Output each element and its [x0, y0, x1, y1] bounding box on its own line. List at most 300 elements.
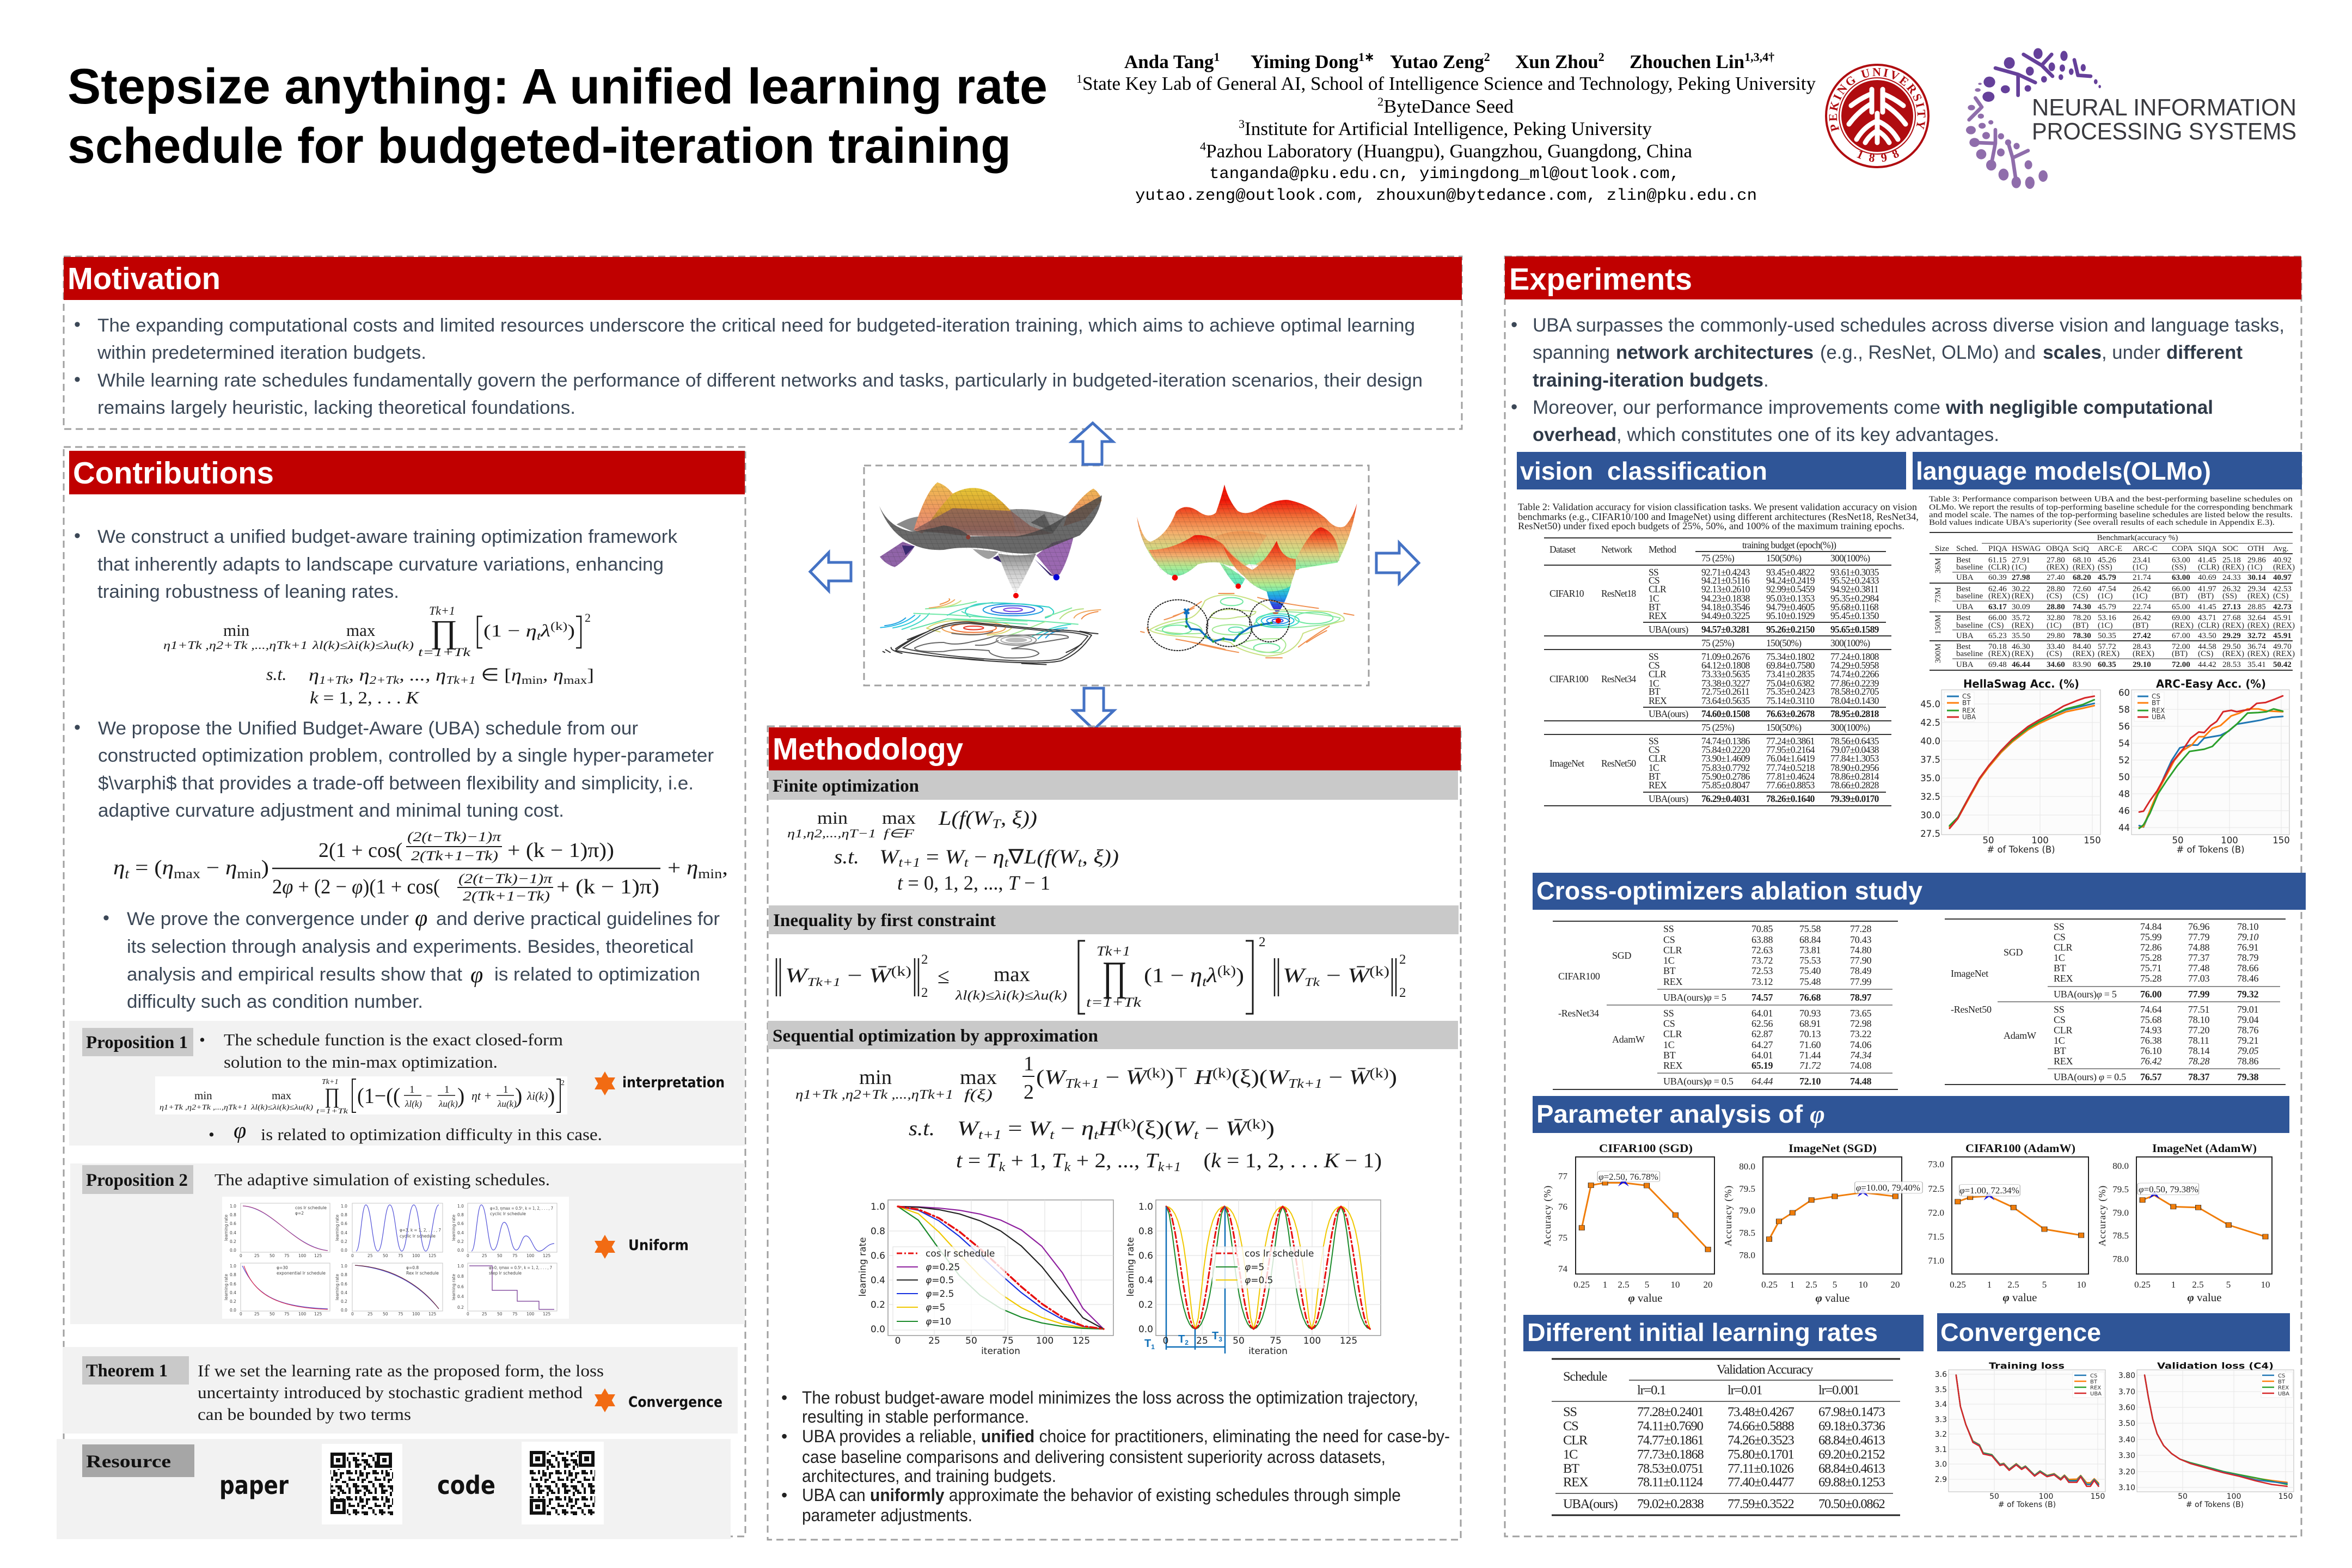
heading: motivation: Motivation — [68, 261, 220, 296]
table: initial learning rate accuracy: UBA(ours) — [1563, 1497, 1618, 1511]
table: CIFAR100 ablation: 72.98 — [1850, 1018, 1872, 1029]
chart: CIFAR100 SGD: 2.5 — [1618, 1279, 1630, 1290]
formula: min-max objective — [163, 604, 594, 707]
chart: training loss: 3.2 — [1935, 1430, 1947, 1439]
table 2: validation accuracy: 94.21±0.5116 — [1701, 575, 1750, 586]
table 3: OLMo benchmark results: 72.00 — [2172, 660, 2190, 669]
table 3: OLMo benchmark results: 43.50 — [2198, 632, 2216, 640]
formula: sequential optimization: k+1 — [1158, 1160, 1181, 1174]
table: ImageNet ablation: 78.76 — [2237, 1025, 2258, 1036]
text: convergence sub-bullet: and derive practical guidelines for — [436, 909, 720, 929]
formula: inequality: W — [1283, 964, 1300, 987]
table 3: OLMo benchmark results: Avg. — [2273, 544, 2288, 553]
table 2: validation accuracy: 78.58±0.2705 — [1830, 686, 1879, 697]
table: ImageNet ablation: 79.01 — [2237, 1004, 2258, 1015]
chart: CIFAR100 AdamW — [1928, 1142, 2088, 1304]
chart: cyclic learning rate curves: 0.0 — [1138, 1324, 1153, 1335]
table: initial learning rate accuracy: BT — [1563, 1461, 1579, 1476]
table 3: OLMo benchmark results: (REX) — [2222, 650, 2244, 658]
formula: finite optimization: t = 0, 1, 2, ..., T − 1 — [897, 872, 1050, 895]
formula: closed-form objective: ( — [393, 1083, 400, 1108]
chart: HellaSwag accuracy: 35.0 — [1920, 773, 1940, 783]
table: initial learning rate accuracy: 77.40±0.4477 — [1728, 1475, 1794, 1490]
chart: training loss: 150 — [2091, 1492, 2105, 1501]
table: ImageNet ablation: REX — [2054, 973, 2073, 984]
chart: HellaSwag accuracy: # of Tokens (B) — [1987, 844, 2055, 855]
formula: finite optimization: − — [968, 846, 993, 868]
table 2: validation accuracy: 75.84±0.2220 — [1701, 744, 1750, 755]
table: CIFAR100 ablation: 65.19 — [1751, 1060, 1773, 1071]
table 3: OLMo benchmark results: (1C) — [2012, 563, 2026, 572]
table 3: OLMo benchmark results: (1C) — [2098, 621, 2112, 630]
formula: sequential optimization: W — [1267, 1066, 1285, 1089]
chart: HellaSwag accuracy: 30.0 — [1920, 810, 1940, 820]
formula: finite optimization: η — [993, 846, 1003, 868]
table 2: validation accuracy: REX — [1649, 780, 1667, 791]
table: ImageNet ablation: 76.42 — [2140, 1056, 2161, 1067]
formula: UBA schedule: η — [162, 856, 174, 879]
text: experiments summary: . — [1763, 370, 1769, 391]
table 3: OLMo benchmark results: (1C) — [2133, 563, 2147, 572]
chart: ImageNet SGD: 79.5 — [1739, 1184, 1755, 1194]
table: initial learning rate accuracy: 74.66±0.5888 — [1728, 1419, 1794, 1434]
heading: cross-optimizers ablation study: Cross-optimizers ablation study — [1536, 877, 1922, 905]
table 2: validation accuracy: SS — [1649, 567, 1658, 578]
chart: six schedule approximations: Rex lr schedule — [406, 1271, 439, 1276]
icon: NeurIPS logo: PROCESSING SYSTEMS — [2032, 118, 2296, 145]
chart: six schedule approximations: 1.0 — [341, 1264, 347, 1269]
table 3: OLMo benchmark results: (REX) — [1988, 650, 2010, 658]
formula: finite optimization — [787, 807, 1119, 895]
table 2: validation accuracy: 95.35±0.2984 — [1830, 593, 1879, 604]
table 3: OLMo benchmark results — [1930, 532, 2295, 670]
formula: UBA schedule: + (k − 1)π)) — [507, 839, 614, 862]
formula: inequality — [776, 935, 1406, 1014]
panel: experiments — [1505, 256, 2306, 1536]
text: theorem statement: If we set the learning rate as the proposed form, the loss — [198, 1361, 604, 1380]
formula: sequential optimization: (k) — [1247, 1117, 1266, 1132]
table 2: validation accuracy: 77.84±1.3053 — [1830, 753, 1879, 764]
callout: interpretation: interpretation — [622, 1074, 725, 1091]
table: ImageNet ablation: 79.04 — [2237, 1014, 2258, 1025]
formula: min-max objective: η — [511, 665, 520, 684]
formula: closed-form objective: ) — [515, 1083, 522, 1108]
table 3: OLMo benchmark results: SciQ — [2073, 544, 2089, 553]
chart: validation loss: 3.20 — [2118, 1468, 2135, 1477]
chart: ImageNet SGD: 78.0 — [1739, 1250, 1755, 1260]
chart: CIFAR100 SGD: CIFAR100 (SGD) — [1599, 1142, 1693, 1155]
table 3: OLMo benchmark results: 44.58 — [2198, 642, 2216, 651]
table: CIFAR100 ablation: 77.99 — [1850, 976, 1872, 987]
chart: six schedule approximations: 0.6 — [457, 1284, 464, 1289]
table: initial learning rate accuracy: 68.84±0.4613 — [1818, 1461, 1885, 1476]
table 3: OLMo benchmark results: 27.91 — [2012, 556, 2030, 565]
chart: six schedule approximations: 0.2 — [341, 1299, 347, 1304]
panel: methodology — [768, 726, 1461, 1540]
chart: ARC-Easy accuracy: 52 — [2118, 755, 2130, 765]
chart: six schedule approximations: 0 — [467, 1312, 469, 1316]
table 3: OLMo benchmark results: Best — [1956, 614, 1971, 622]
text: convergence sub-bullet: φ — [415, 906, 427, 931]
chart: training loss: Training loss — [1989, 1361, 2065, 1371]
table 3: OLMo benchmark results: 45.26 — [2098, 556, 2116, 565]
chart: CIFAR100 SGD: 5 — [1645, 1279, 1649, 1290]
table 3: OLMo benchmark results: baseline — [1956, 563, 1983, 572]
formula: sequential optimization: − — [1054, 1117, 1081, 1140]
formula: min-max objective: ] — [587, 665, 594, 684]
table: CIFAR100 ablation: 72.10 — [1799, 1076, 1821, 1087]
table: ImageNet ablation: 78.11 — [2188, 1035, 2209, 1046]
table 3: OLMo benchmark results: SIQA — [2198, 544, 2217, 553]
table 3: OLMo benchmark results: 83.90 — [2073, 660, 2091, 669]
chart: six schedule approximations: 1.0 — [457, 1204, 464, 1209]
table 3: OLMo benchmark results: Best — [1956, 556, 1971, 565]
table: CIFAR100 ablation: UBA(ours)φ = 5 — [1663, 992, 1726, 1003]
formula: closed-form objective: Tk+1 — [322, 1078, 338, 1086]
authors and affiliations: 2 — [1598, 50, 1604, 64]
formula: UBA schedule: (2(t−Tk)−1)π — [407, 830, 502, 844]
chart: ImageNet AdamW: φ value — [2187, 1291, 2222, 1304]
chart: validation loss: 3.60 — [2118, 1404, 2135, 1412]
panel: motivation — [64, 256, 1462, 429]
title: Stepsize anything: A unified learning rate — [68, 59, 1048, 114]
chart: learning rate curves by phi: 125 — [1073, 1336, 1090, 1346]
formula: min-max objective: η — [309, 665, 317, 684]
table 2: validation accuracy: 73.90±1.4609 — [1701, 753, 1750, 764]
heading: vision classification: vision classification — [1520, 457, 1767, 485]
table: ImageNet ablation: 78.10 — [2188, 1014, 2209, 1025]
chart: six schedule approximations: 125 — [428, 1312, 437, 1316]
formula: sequential optimization: (W — [1036, 1066, 1062, 1089]
table 2: validation accuracy: 74.29±0.5958 — [1830, 660, 1879, 671]
table 3: OLMo benchmark results: (REX) — [2012, 621, 2033, 630]
chart: six schedule approximations: 0 — [240, 1253, 242, 1258]
table 2: validation accuracy: 76.63±0.2678 — [1766, 708, 1815, 719]
chart: training loss: UBA — [2090, 1391, 2102, 1397]
table: CIFAR100 ablation: 78.97 — [1850, 992, 1872, 1003]
chart: validation loss — [2118, 1361, 2294, 1509]
table 3: OLMo benchmark results: 67.00 — [2172, 632, 2190, 640]
text: second contribution: We propose the Unified Budget-Aware (UBA) schedule from our — [98, 718, 638, 739]
table: initial learning rate accuracy: 74.77±0.1861 — [1637, 1433, 1704, 1448]
text: motivation bullets: The expanding computational costs and limited resources underscore the critical need for budgeted-iteration training, which aims to achieve optimal learning — [97, 315, 1415, 336]
table 2: validation accuracy: 95.10±0.1929 — [1766, 610, 1815, 621]
chart: cyclic learning rate curves: iteration — [1248, 1346, 1288, 1357]
chart: HellaSwag accuracy: BT — [1962, 699, 1971, 707]
formula: finite optimization: L(f(W — [939, 807, 985, 830]
table: ImageNet ablation: 74.88 — [2188, 942, 2209, 953]
chart: cyclic learning rate curves: 0.6 — [1138, 1251, 1153, 1261]
text: second contribution: • — [74, 717, 81, 738]
formula: min-max objective: min — [522, 673, 543, 687]
formula: sequential optimization: Tk+1 — [1288, 1077, 1322, 1091]
table 3: OLMo benchmark results: UBA — [1956, 573, 1974, 582]
text: methodology takeaways: case baseline comparisons and delivering consistent superiority across datasets, — [802, 1447, 1386, 1467]
text: proposition 1 statement: The schedule function is the exact closed-form — [224, 1030, 563, 1049]
table 3: OLMo benchmark results: 27.40 — [2047, 573, 2065, 582]
table 3: OLMo benchmark results: COPA — [2172, 544, 2193, 553]
table 2: validation accuracy: 78.56±0.6435 — [1830, 736, 1879, 746]
chart: six schedule approximations: 1.0 — [230, 1204, 236, 1209]
chart: learning rate curves by phi: 1.0 — [871, 1202, 885, 1212]
table: ImageNet ablation: 77.03 — [2188, 973, 2209, 984]
formula: inequality: (k) — [1369, 964, 1389, 979]
table 3: OLMo benchmark results: (1C) — [2098, 592, 2112, 601]
chart: ARC-Easy accuracy: 46 — [2118, 806, 2130, 816]
formula: finite optimization: f∈F — [884, 826, 915, 840]
chart: six schedule approximations: 25 — [254, 1253, 260, 1258]
chart: ImageNet AdamW: 2.5 — [2192, 1279, 2204, 1290]
chart: six schedule approximations: cos lr schedule — [295, 1205, 327, 1210]
authors and affiliations: 2 — [1484, 50, 1490, 64]
chart: learning rate curves by phi — [857, 1200, 1113, 1357]
table 3: OLMo benchmark results: 35.72 — [2012, 614, 2030, 622]
section: convergence — [1935, 1313, 2294, 1509]
table 2: validation accuracy: 75.90±0.2786 — [1701, 771, 1750, 782]
table 3: OLMo benchmark results: (SS) — [2098, 563, 2112, 572]
table 2: validation accuracy: Network — [1601, 544, 1632, 555]
chart: CIFAR100 AdamW: φ=1.00, 72.34% — [1959, 1185, 2019, 1196]
chart: ARC-Easy accuracy: 58 — [2118, 705, 2130, 715]
formula: min-max objective: k = 1, 2, . . . K — [310, 688, 420, 707]
formula: finite optimization: t — [1004, 856, 1009, 870]
icon: grey and purple loss surfaces — [879, 482, 1102, 665]
chart: training loss: 3.0 — [1935, 1460, 1947, 1469]
table: ImageNet ablation: REX — [2054, 1056, 2073, 1067]
table: CIFAR100 ablation: 1C — [1663, 955, 1675, 966]
chart: six schedule approximations: 0.2 — [457, 1239, 464, 1244]
table: initial learning rate accuracy — [1552, 1359, 1900, 1515]
chart: six schedule approximations: 25 — [367, 1312, 373, 1316]
table: ImageNet ablation: 74.84 — [2140, 921, 2161, 932]
section: parameter analysis — [1533, 1096, 2289, 1304]
text: proposition 1 statement: solution to the min-max optimization. — [224, 1052, 498, 1071]
formula: UBA schedule: + η — [667, 856, 697, 879]
chart: six schedule approximations: 75 — [284, 1253, 290, 1258]
table 3: OLMo benchmark results: 27.98 — [2012, 573, 2030, 582]
chart: ARC-Easy accuracy: CS — [2152, 693, 2160, 700]
table: initial learning rate accuracy: Validation Accuracy — [1717, 1362, 1814, 1377]
text: proposition 1 statement: • — [199, 1030, 205, 1049]
table: CIFAR100 ablation: BT — [1663, 1050, 1676, 1061]
table 3: OLMo benchmark results: (REX) — [2012, 592, 2033, 601]
table 3: OLMo benchmark results: 40.97 — [2273, 573, 2292, 582]
text: table 3 caption: OLMo. We report the results of top-performing baseline schedule for the corresponding benchmark — [1929, 503, 2293, 512]
table 2: validation accuracy: 78.95±0.2818 — [1830, 708, 1879, 719]
chart: six schedule approximations: 25 — [482, 1312, 487, 1316]
label: proposition 1: Proposition 1 — [86, 1033, 188, 1052]
table 3: OLMo benchmark results: (CS) — [2198, 650, 2213, 658]
table 2: validation accuracy: BT — [1649, 602, 1661, 612]
chart: six schedule approximations: 0.8 — [230, 1212, 236, 1217]
table 3: OLMo benchmark results: 68.20 — [2073, 573, 2091, 582]
chart: six schedule approximations: 0.8 — [457, 1212, 464, 1217]
text: motivation bullets — [74, 314, 1423, 418]
chart: six schedule approximations: 0 — [351, 1312, 354, 1316]
formula: sequential optimization: H — [1188, 1066, 1214, 1089]
icon: NeurIPS logo: NEURAL INFORMATION — [2032, 94, 2296, 121]
callout: convergence — [595, 1388, 722, 1412]
formula: UBA schedule: 2(1 + cos( — [318, 839, 402, 862]
chart: CIFAR100 SGD: 77 — [1558, 1171, 1568, 1181]
table 3: OLMo benchmark results: 35.50 — [2012, 632, 2030, 640]
table 3: OLMo benchmark results: (CS) — [2073, 592, 2088, 601]
formula: sequential optimization: min — [859, 1066, 892, 1089]
table 2: validation accuracy: 95.65±0.1589 — [1830, 624, 1879, 635]
text: table 3 caption: and model scale. The names of the top-performing baseline schedules are listed below the results. — [1929, 511, 2293, 519]
table: ImageNet ablation: AdamW — [2004, 1030, 2036, 1041]
chart: ImageNet AdamW: 79.5 — [2112, 1184, 2129, 1195]
chart: ARC-Easy accuracy: UBA — [2152, 713, 2166, 721]
table 2: validation accuracy: 75.04±0.6382 — [1766, 678, 1815, 689]
chart: six schedule approximations: learning rate — [224, 1274, 229, 1300]
icon: code QR code — [522, 1442, 604, 1524]
text: methodology takeaways: • — [781, 1426, 787, 1446]
table 3: OLMo benchmark results: 29.80 — [2047, 632, 2065, 640]
table: ImageNet ablation: 79.32 — [2237, 989, 2258, 1000]
chart: ImageNet AdamW — [2097, 1142, 2272, 1304]
table 3: OLMo benchmark results: 40.92 — [2273, 556, 2292, 565]
table 2: validation accuracy: 75.14±0.3110 — [1766, 695, 1815, 706]
icon: paper QR code — [322, 1444, 402, 1524]
chart: six schedule approximations: 0.2 — [457, 1305, 464, 1310]
chart: learning rate curves by phi: 0.2 — [871, 1300, 885, 1310]
formula: min-max objective: Tk+1 — [446, 673, 476, 687]
formula: UBA schedule: (2(t−Tk)−1)π — [458, 872, 553, 886]
formula: inequality: λl(k)≤λi(k)≤λu(k) — [955, 989, 1067, 1003]
heading: experiments: Experiments — [1509, 262, 1692, 297]
table 3: OLMo benchmark results: 62.46 — [1988, 585, 2007, 593]
text: motivation bullets: • — [74, 314, 81, 335]
chart: CIFAR100 SGD: 74 — [1558, 1264, 1568, 1274]
table 3: OLMo benchmark results: (CS) — [2047, 650, 2062, 658]
table 3: OLMo benchmark results: (REX) — [2222, 621, 2244, 630]
chart: six schedule approximations: 50 — [497, 1312, 503, 1316]
table 2: validation accuracy: 75 (25%) — [1701, 553, 1735, 564]
formula: inequality: 2 — [921, 952, 928, 967]
table: CIFAR100 ablation: 71.72 — [1799, 1060, 1821, 1071]
chart: six schedule approximations: 50 — [383, 1312, 388, 1316]
table: ImageNet ablation: 76.10 — [2140, 1045, 2161, 1056]
formula: finite optimization: t — [1078, 856, 1083, 870]
table: ImageNet ablation: SS — [2054, 1004, 2065, 1015]
authors and affiliations: 1,3,4† — [1744, 50, 1774, 64]
table: CIFAR100 ablation: 75.40 — [1799, 965, 1821, 976]
table 3: OLMo benchmark results: (REX) — [2247, 650, 2269, 658]
table 3: OLMo benchmark results: 28.85 — [2247, 603, 2266, 611]
chart: CIFAR100 AdamW: 1 — [1987, 1279, 1992, 1290]
chart: ImageNet SGD — [1723, 1142, 1922, 1304]
chart: HellaSwag accuracy: 100 — [2031, 835, 2049, 846]
table 2: validation accuracy: ResNet18 — [1601, 588, 1636, 599]
chart: CIFAR100 AdamW: 10 — [2077, 1279, 2086, 1290]
chart: ARC-Easy accuracy: 56 — [2118, 721, 2130, 732]
formula: sequential optimization: (ξ)( — [1232, 1066, 1267, 1089]
table 2: validation accuracy: 75.34±0.1802 — [1766, 651, 1815, 662]
formula: sequential optimization: ( — [1181, 1149, 1211, 1172]
table 2: validation accuracy: 75.83±0.7792 — [1701, 762, 1750, 773]
table 3: OLMo benchmark results: 32.80 — [2047, 614, 2065, 622]
chart: six schedule approximations — [222, 1197, 569, 1319]
table: ImageNet ablation: CLR — [2054, 942, 2073, 953]
formula: sequential optimization: + 1, — [1005, 1149, 1052, 1172]
chart: six schedule approximations: 1.0 — [230, 1264, 236, 1269]
chart: six schedule approximations: 75 — [398, 1253, 403, 1258]
table: initial learning rate accuracy: Schedule — [1563, 1369, 1608, 1384]
chart: validation loss: 3.70 — [2118, 1388, 2135, 1396]
table 3: OLMo benchmark results: Best — [1956, 585, 1971, 593]
chart: cyclic learning rate curves: 50 — [1233, 1336, 1245, 1346]
table: CIFAR100 ablation: 64.01 — [1751, 1050, 1773, 1061]
formula: sequential optimization: − — [1099, 1066, 1126, 1089]
authors and affiliations: Yutao Zeng — [1390, 51, 1484, 72]
chart: ImageNet SGD: φ=10.00, 79.40% — [1856, 1183, 1920, 1193]
chart: CIFAR100 AdamW: 72.0 — [1928, 1208, 1944, 1218]
formula: sequential optimization: − — [1198, 1117, 1226, 1140]
table 3: OLMo benchmark results: (CLR) — [1988, 563, 2010, 572]
chart: ARC-Easy accuracy: 50 — [2118, 772, 2130, 782]
table 2: validation accuracy: 94.23±0.1838 — [1701, 593, 1750, 604]
table: initial learning rate accuracy: 68.84±0.4613 — [1818, 1433, 1885, 1448]
chart: CIFAR100 SGD: 75 — [1558, 1233, 1567, 1243]
chart: six schedule approximations: exponential lr schedule — [277, 1271, 326, 1276]
text: methodology takeaways: architectures, and training budgets. — [802, 1466, 1056, 1486]
label: paper: paper — [219, 1471, 289, 1500]
table: CIFAR100 ablation: 68.84 — [1799, 934, 1821, 945]
chart: cyclic learning rate curves: 1.0 — [1138, 1202, 1153, 1212]
chart: six schedule approximations: 0.8 — [230, 1272, 236, 1277]
table 3: OLMo benchmark results: UBA — [1956, 632, 1974, 640]
table: CIFAR100 ablation: 74.34 — [1850, 1050, 1872, 1061]
chart: six schedule approximations: φ=2 — [295, 1211, 304, 1216]
text: second contribution — [74, 717, 714, 821]
table: initial learning rate accuracy: 78.53±0.0751 — [1637, 1461, 1704, 1476]
table 2: validation accuracy: Dataset — [1549, 544, 1576, 555]
table 2: validation accuracy: 94.57±0.3281 — [1701, 624, 1750, 635]
table 2: validation accuracy: 95.52±0.2433 — [1830, 575, 1879, 586]
table: initial learning rate accuracy: lr=0.01 — [1728, 1383, 1762, 1398]
formula: sequential optimization: t — [1050, 1128, 1055, 1142]
subheading: sequential optimization: Sequential optimization by approximation — [773, 1026, 1098, 1046]
table 3: OLMo benchmark results: 46.44 — [2012, 660, 2030, 669]
table 3: OLMo benchmark results: 26.42 — [2133, 585, 2151, 593]
table: CIFAR100 ablation: CIFAR100 — [1558, 971, 1600, 982]
chart: learning rate curves by phi: iteration — [981, 1346, 1020, 1357]
chart: learning rate curves by phi: φ=5 — [926, 1302, 945, 1313]
text: methodology takeaways: The robust budget-aware model minimizes the loss across the optimization trajectory, — [802, 1388, 1418, 1407]
table: CIFAR100 ablation: UBA(ours)φ = 0.5 — [1663, 1076, 1734, 1087]
table 2: validation accuracy: 77.24±0.1808 — [1830, 651, 1879, 662]
table 2: validation accuracy: Method — [1649, 544, 1676, 555]
table 3: OLMo benchmark results: 28.80 — [2047, 603, 2065, 611]
label: code: code — [437, 1471, 495, 1500]
chart: cyclic learning rate curves: cos lr schedule — [1245, 1248, 1314, 1259]
text: experiments summary: with negligible computational — [1945, 397, 2213, 418]
chart: learning rate curves by phi: learning rate — [857, 1237, 868, 1297]
chart: six schedule approximations: 100 — [298, 1312, 307, 1316]
formula: sequential optimization: t+1 — [978, 1128, 1002, 1142]
table 2: validation accuracy: UBA(ours) — [1649, 793, 1688, 804]
table 3: OLMo benchmark results: 42.53 — [2273, 585, 2292, 593]
table: CIFAR100 ablation — [1553, 921, 1898, 1089]
icon: Peking University seal: PEKING UNIVERSITY — [1829, 68, 1926, 132]
table: initial learning rate accuracy: 77.28±0.2401 — [1637, 1405, 1704, 1419]
table 2: validation accuracy: 94.92±0.3811 — [1830, 584, 1878, 595]
table 3: OLMo benchmark results: 47.54 — [2098, 585, 2116, 593]
chart: validation loss: REX — [2278, 1385, 2289, 1391]
chart: HellaSwag accuracy: UBA — [1962, 713, 1976, 721]
formula: min-max objective: max — [346, 621, 376, 640]
